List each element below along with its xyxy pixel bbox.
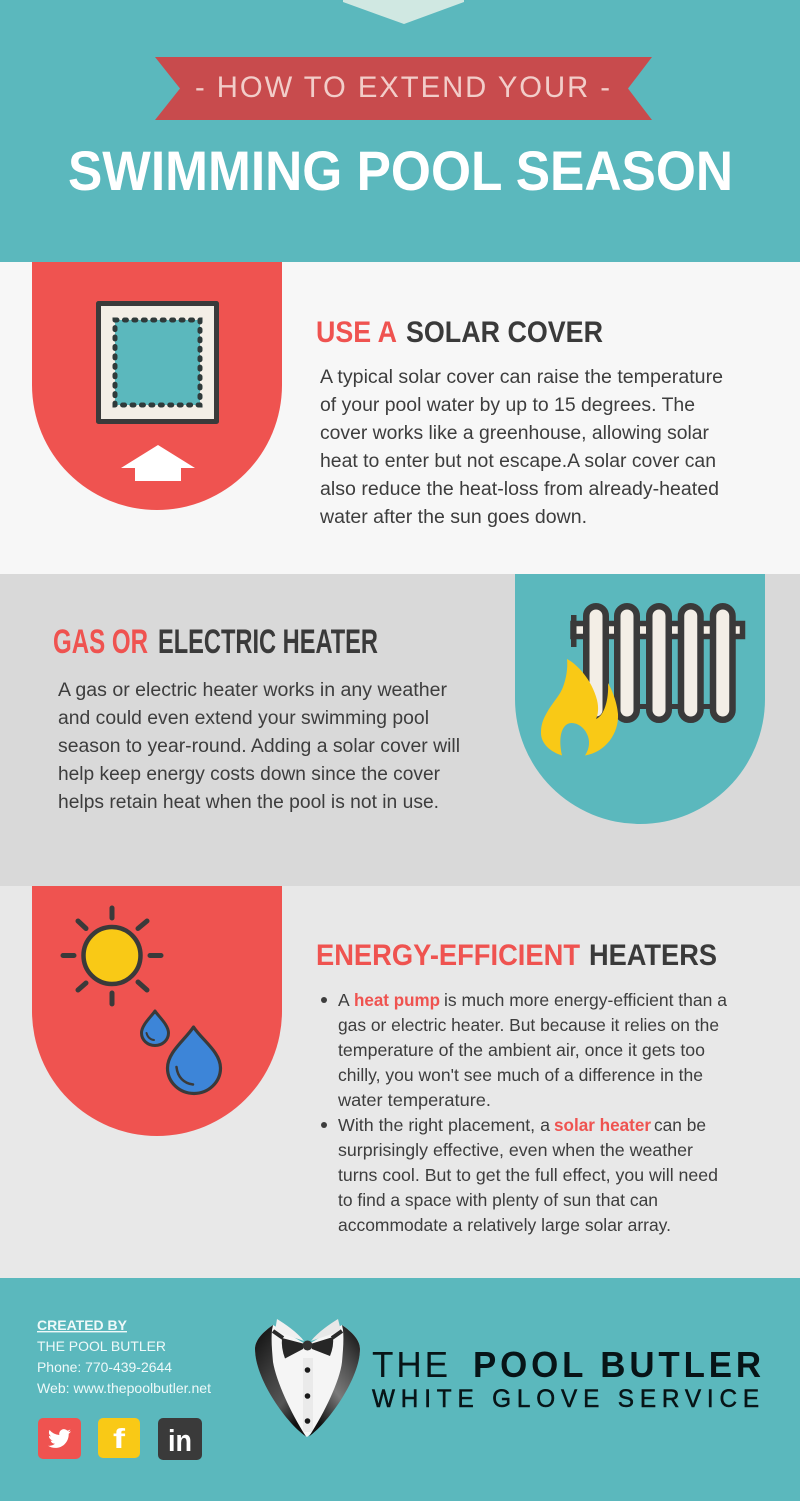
panel: solar cover: [0, 262, 800, 574]
icon: twitter: [38, 1418, 81, 1459]
shield: heater icon: [515, 574, 765, 824]
text: heater description: [58, 680, 460, 813]
text: heater description: season to year-round. Adding a solar cover will: [58, 736, 460, 757]
text: heat pump bullet: gas or electric heater. But because it relies on the: [338, 1015, 719, 1035]
text: heater description: help keep energy costs down since the cover: [58, 764, 441, 785]
ribbon banner: [155, 57, 652, 120]
heading: gas or electric heater: [53, 623, 378, 661]
panel: energy-efficient heaters: [0, 886, 800, 1278]
text: credits: CREATED BY: [37, 1317, 128, 1333]
icon: facebook: [98, 1418, 140, 1458]
text: solar heater bullet: With the right placement, a: [338, 1115, 550, 1135]
icon: radiator: [571, 606, 742, 720]
text: heat pump bullet: temperature of the ambient air, once it gets too: [338, 1040, 705, 1060]
logo wordmark: [372, 1344, 765, 1413]
icon: tuxedo logo: [255, 1319, 360, 1437]
icon: up arrow: [121, 445, 195, 481]
text: solar heater bullet: turns cool. But to get the full effect, you will need: [338, 1165, 718, 1185]
logo wordmark: THE: [372, 1344, 451, 1385]
text: heat pump bullet: chilly, you won't see much of a difference in the: [338, 1065, 703, 1085]
icon: linkedin: [158, 1418, 202, 1460]
text: solar cover description: A typical solar cover can raise the temperature: [320, 367, 723, 388]
text: credits: THE POOL BUTLER: [37, 1338, 166, 1354]
heading: energy-efficient heaters: HEATERS: [589, 939, 717, 972]
text: heat pump bullet: water temperature.: [337, 1090, 491, 1110]
text: credits: Web: www.thepoolbutler.net: [37, 1380, 211, 1396]
text: solar cover description: heat to enter but not escape.A solar cover can: [320, 451, 716, 472]
icon: facebook: f: [113, 1423, 126, 1454]
heading: use a solar cover: SOLAR COVER: [406, 316, 603, 349]
text: solar heater bullet: accommodate a relatively large solar array.: [338, 1215, 671, 1235]
text: heater description: and could even extend your swimming pool: [58, 708, 429, 729]
top chevron: [343, 0, 464, 24]
text: solar cover description: cover works like a greenhouse, allowing solar: [320, 423, 710, 444]
text: credits: Phone: 770-439-2644: [37, 1359, 172, 1375]
text: solar cover description: water after the sun goes down.: [319, 507, 587, 528]
heading: gas or electric heater: ELECTRIC HEATER: [158, 623, 378, 661]
text: heat pump bullet: heat pump: [354, 990, 440, 1010]
header panel: [0, 0, 800, 262]
text: solar heater bullet: can be: [654, 1115, 706, 1135]
ribbon text: - HOW TO EXTEND YOUR -: [195, 71, 612, 104]
heading: use a solar cover: [316, 316, 603, 349]
heading: use a solar cover: USE A: [316, 316, 397, 349]
logo wordmark: WHITE GLOVE SERVICE: [372, 1385, 765, 1413]
text: heat pump bullet: [321, 990, 727, 1110]
shield: solar cover icon: [32, 262, 282, 510]
icon: pool cover: [98, 304, 216, 422]
text: heat pump bullet: A: [338, 990, 350, 1010]
text: solar cover description: of your pool water by up to 15 degrees. The: [320, 395, 695, 416]
heading: gas or electric heater: GAS OR: [53, 623, 148, 661]
icon: sun: [63, 908, 161, 1004]
text: solar heater bullet: solar heater: [554, 1115, 651, 1135]
icon: flame: [541, 659, 618, 756]
text: solar heater bullet: to find a space with plenty of sun that can: [338, 1190, 658, 1210]
logo wordmark: POOL BUTLER: [473, 1344, 765, 1385]
text: solar heater bullet: [321, 1115, 718, 1235]
text: solar cover description: [319, 367, 723, 528]
text: solar cover description: also reduce the heat-loss from already-heated: [320, 479, 719, 500]
title: SWIMMING POOL SEASON: [68, 139, 733, 202]
icon: small water drop: [142, 1011, 168, 1046]
text: credits: [37, 1317, 211, 1396]
footer panel: [0, 1278, 800, 1501]
shield: sun and water icon: [32, 886, 282, 1136]
text: heat pump bullet: is much more energy-efficient than a: [444, 990, 727, 1010]
text: heater description: A gas or electric heater works in any weather: [58, 680, 448, 701]
icon: large water drop: [168, 1027, 220, 1094]
text: heater description: helps retain heat when the pool is not in use.: [58, 792, 439, 813]
heading: energy-efficient heaters: ENERGY-EFFICIENT: [316, 939, 580, 972]
text: solar heater bullet: surprisingly effective, even when the weather: [338, 1140, 693, 1160]
icon: linkedin: in: [168, 1423, 192, 1458]
panel: gas or electric heater: [0, 574, 800, 886]
